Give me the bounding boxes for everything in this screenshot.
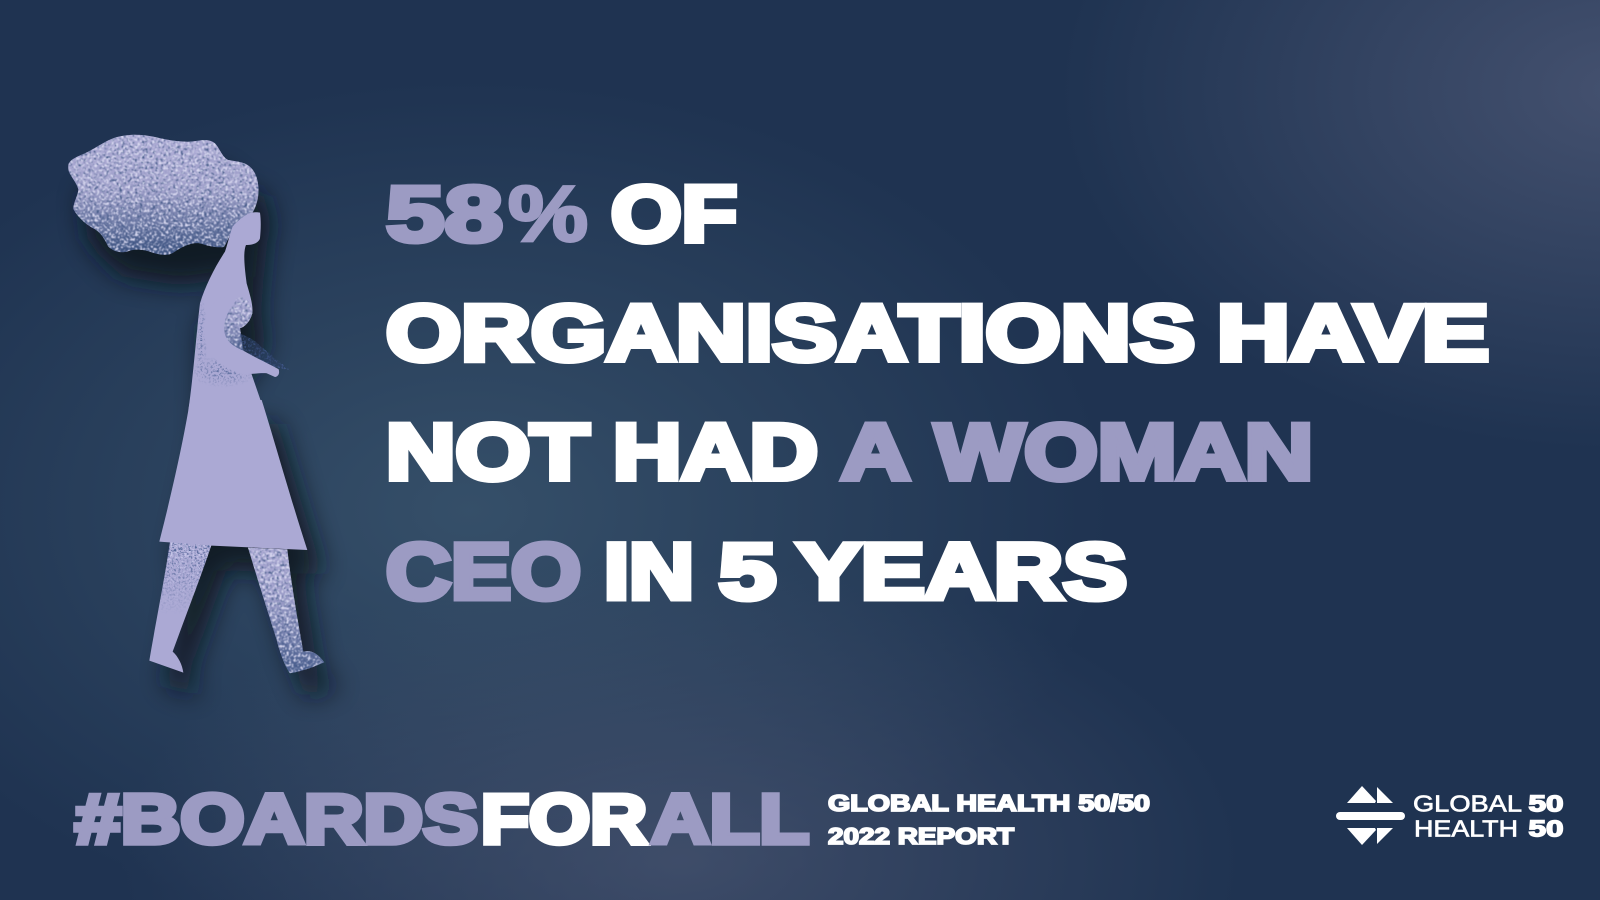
report label: GLOBAL HEALTH 50/50 [828,790,1150,816]
headline line 3: A [841,407,910,496]
headline line 1: 58 [386,169,503,258]
headline line 1: % [508,169,588,258]
headline line 3: NOT [386,407,589,496]
headline line 3: WOMAN [935,407,1313,496]
torso speckle [190,297,257,388]
report label [828,790,1150,849]
logo wordmark: 50 [1528,816,1564,842]
hashtag: ALL [651,780,809,858]
headline line 2 [386,288,1489,377]
headline [386,169,1489,616]
logo wordmark [1413,790,1564,842]
logo: Global Health 50/50 [1336,786,1564,845]
headline line 1 [386,169,737,258]
figure shadow [82,164,340,697]
headline line 4: CEO [386,526,581,616]
arm [204,297,291,377]
headline line 1: OF [611,169,737,258]
headline line 2: HAVE [1217,288,1489,377]
logo wordmark: 50 [1528,790,1564,816]
headline line 3: HAD [613,407,818,496]
headline line 3 [386,407,1313,496]
report label: 2022 REPORT [828,823,1014,849]
hashtag: #BOARDS [75,780,478,858]
headline line 4: IN [604,526,694,616]
logo wordmark: HEALTH [1414,816,1518,842]
hashtag [75,780,809,858]
logo mark [1336,786,1405,845]
logo wordmark: GLOBAL [1413,790,1522,816]
legs [149,542,324,673]
headline line 4: 5 [719,526,776,616]
headline line 4: YEARS [797,526,1127,616]
headline line 4 [386,526,1127,616]
hair [68,135,259,255]
headline line 2: ORGANISATIONS [386,288,1195,377]
hashtag: FOR [481,780,647,858]
dress and body [159,212,307,550]
illustration: walking woman with flowing hair [68,135,340,697]
